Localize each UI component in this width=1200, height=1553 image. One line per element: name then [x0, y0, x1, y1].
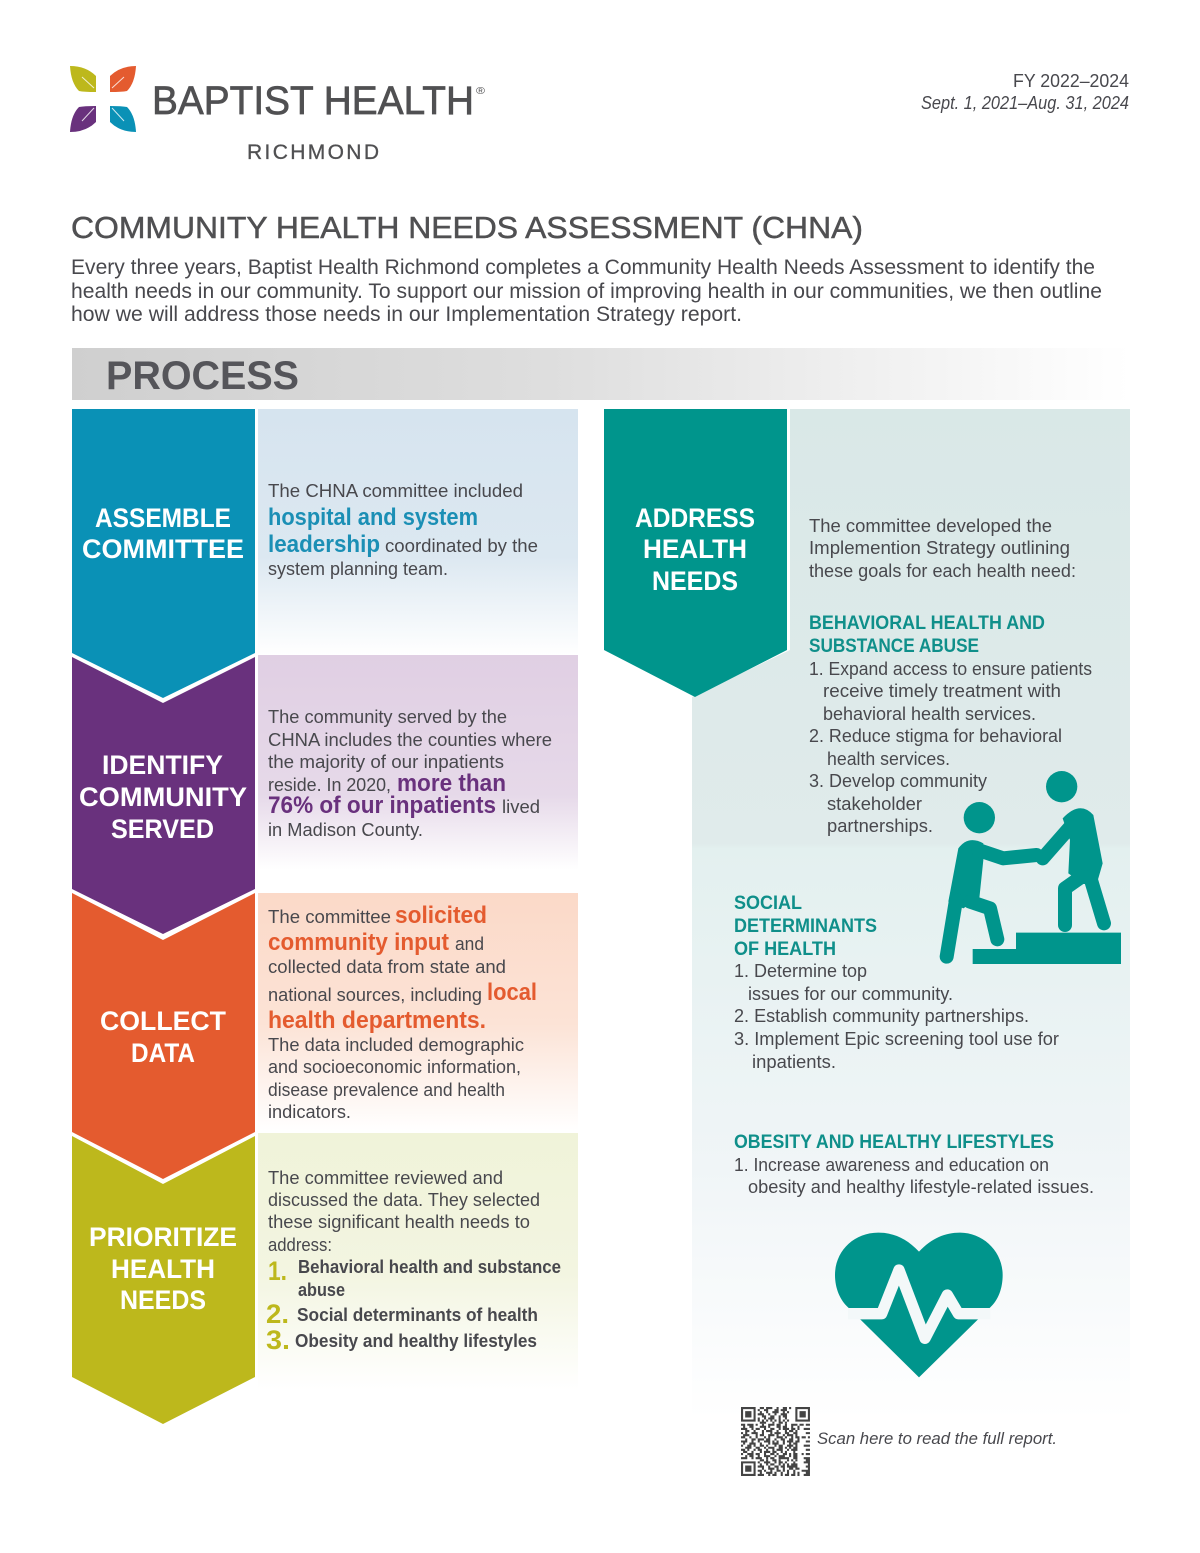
panel: assemble committee text: coordinated by the: [385, 536, 538, 556]
text: behavioral health goals: 1. Expand access to ensure patients: [809, 659, 1092, 679]
chevron: identify community served: IDENTIFY: [102, 750, 223, 780]
panel: prioritize health needs text: The committee reviewed and: [268, 1168, 503, 1188]
chevron: prioritize health needs: [72, 1136, 255, 1424]
chevron: address health needs: ADDRESS: [635, 503, 755, 533]
text: social determinants goals: SOCIAL: [734, 893, 802, 914]
panel: prioritize health needs text: 2.: [266, 1299, 289, 1329]
panel: identify community text: lived: [502, 797, 540, 817]
process heading bar: [72, 348, 1130, 400]
QR code: [741, 1408, 810, 1475]
step: collect data: [72, 893, 578, 1179]
registered mark: ®: [476, 86, 486, 97]
panel: prioritize health needs text: 3.: [266, 1325, 290, 1355]
text: behavioral health goals: BEHAVIORAL HEALTH AND: [809, 613, 1045, 634]
text: social determinants goals: DETERMINANTS: [734, 916, 877, 937]
panel: collect data text: collected data from state and: [268, 957, 506, 977]
QR caption: Scan here to read the full report.: [817, 1429, 1057, 1448]
process heading bar: PROCESS: [106, 354, 299, 398]
panel: identify community text: The community served by the: [268, 707, 507, 727]
panel: collect data text: indicators.: [268, 1102, 351, 1122]
brand name: BAPTIST HEALTH: [152, 79, 474, 123]
panel: identify community text: 76% of our inpatients: [268, 792, 496, 819]
panel: identify community text: [258, 655, 578, 870]
panel: collect data text: community input: [268, 929, 449, 956]
chevron: identify community served: COMMUNITY: [79, 782, 247, 812]
text: strategy intro: these goals for each health need:: [809, 561, 1076, 581]
text: behavioral health goals: 3. Develop community: [809, 771, 987, 791]
chevron: assemble committee: ASSEMBLE: [95, 503, 231, 533]
chevron: collect data: COLLECT: [100, 1006, 226, 1036]
text: behavioral health goals: stakeholder: [827, 794, 922, 814]
intro text: health needs in our community. To support our mission of improving health in our communities, we then outline: [71, 280, 1102, 303]
text: obesity goals: obesity and healthy lifestyle-related issues.: [748, 1177, 1094, 1197]
panel: assemble committee text: leadership: [268, 531, 380, 558]
text: social determinants goals: 3. Implement Epic screening tool use for: [734, 1029, 1059, 1049]
icon: four-leaf mark: [70, 66, 136, 132]
chevron: prioritize health needs: NEEDS: [120, 1285, 206, 1315]
panel: collect data text: and socioeconomic information,: [268, 1057, 521, 1077]
text: behavioral health goals: 2. Reduce stigma for behavioral: [809, 726, 1062, 746]
text: behavioral health goals: behavioral health services.: [823, 704, 1036, 724]
panel: assemble committee text: hospital and system: [268, 504, 478, 531]
panel: prioritize health needs text: Behavioral health and substance: [298, 1257, 561, 1277]
text: social determinants goals: OF HEALTH: [734, 939, 836, 960]
chevron: address health needs: NEEDS: [652, 566, 738, 596]
text: social determinants goals: [734, 893, 1059, 1072]
panel: collect data text: local: [487, 979, 537, 1006]
fiscal year dates: FY 2022–2024: [1013, 71, 1129, 91]
chevron: address health needs: HEALTH: [643, 534, 747, 564]
panel: prioritize health needs text: Obesity and healthy lifestyles: [295, 1331, 537, 1351]
panel: prioritize health needs text: discussed the data. They selected: [268, 1190, 540, 1210]
panel: address health needs background: [692, 409, 1130, 1420]
text: obesity goals: [734, 1132, 1094, 1197]
panel: collect data text: The data included demographic: [268, 1035, 524, 1055]
panel: identify community text: more than: [397, 770, 506, 797]
panel: collect data text: health departments.: [268, 1007, 486, 1034]
panel: prioritize health needs text: abuse: [298, 1280, 345, 1300]
intro text: [71, 256, 1102, 326]
chevron: prioritize health needs: HEALTH: [111, 1254, 215, 1284]
location name: RICHMOND: [247, 141, 379, 164]
panel: assemble committee text: [258, 409, 578, 655]
intro text: how we will address those needs in our Implementation Strategy report.: [71, 303, 742, 326]
panel: prioritize health needs text: 1.: [268, 1256, 287, 1286]
step: address health needs: [604, 409, 1130, 1420]
text: behavioral health goals: receive timely treatment with: [823, 681, 1061, 701]
title: COMMUNITY HEALTH NEEDS ASSESSMENT (CHNA): [71, 210, 863, 245]
text: behavioral health goals: [809, 613, 1092, 836]
text: behavioral health goals: health services.: [827, 749, 950, 769]
chevron: identify community served: SERVED: [111, 814, 214, 844]
text: social determinants goals: inpatients.: [752, 1052, 836, 1072]
text: strategy intro: The committee developed the: [809, 516, 1052, 536]
chevron: prioritize health needs: PRIORITIZE: [89, 1222, 237, 1252]
panel: prioritize health needs text: address:: [268, 1235, 332, 1255]
chevron: collect data: [72, 893, 255, 1179]
step: prioritize health needs: [72, 1133, 578, 1424]
text: social determinants goals: 1. Determine top: [734, 961, 867, 981]
panel: collect data text: national sources, including: [268, 985, 482, 1005]
text: strategy intro: [809, 516, 1076, 581]
logo: [70, 66, 486, 164]
panel: assemble committee text: system planning team.: [268, 559, 448, 579]
text: behavioral health goals: SUBSTANCE ABUSE: [809, 636, 979, 657]
fiscal year dates: [921, 71, 1129, 113]
chevron: collect data: DATA: [131, 1038, 195, 1068]
text: social determinants goals: 2. Establish community partnerships.: [734, 1006, 1029, 1026]
chevron: address health needs: [604, 409, 787, 697]
fiscal year dates: Sept. 1, 2021–Aug. 31, 2024: [921, 93, 1129, 113]
chevron: identify community served: [72, 657, 255, 934]
panel: assemble committee text: The CHNA committee included: [268, 481, 523, 501]
text: obesity goals: 1. Increase awareness and education on: [734, 1155, 1049, 1175]
step: identify community served: [72, 655, 578, 934]
panel: identify community text: the majority of our inpatients: [268, 752, 504, 772]
chevron: assemble committee: COMMITTEE: [82, 534, 244, 564]
step: assemble committee: [72, 409, 578, 698]
panel: prioritize health needs text: these significant health needs to: [268, 1212, 530, 1232]
panel: collect data text: disease prevalence and health: [268, 1080, 505, 1100]
text: strategy intro: Implemention Strategy outlining: [809, 538, 1070, 558]
panel: identify community text: reside. In 2020,: [268, 775, 391, 795]
panel: collect data text: and: [455, 934, 484, 954]
icon: heart with pulse line: [835, 1233, 1003, 1377]
text: social determinants goals: issues for our community.: [748, 984, 953, 1004]
panel: collect data text: solicited: [395, 902, 487, 929]
panel: collect data text: The committee: [268, 907, 391, 927]
panel: identify community text: in Madison County.: [268, 820, 423, 840]
chevron: assemble committee: [72, 409, 255, 698]
panel: prioritize health needs text: Social determinants of health: [297, 1305, 538, 1325]
panel: collect data text: [258, 893, 578, 1131]
text: obesity goals: OBESITY AND HEALTHY LIFESTYLES: [734, 1132, 1054, 1153]
text: behavioral health goals: partnerships.: [827, 816, 933, 836]
panel: identify community text: CHNA includes the counties where: [268, 730, 552, 750]
intro text: Every three years, Baptist Health Richmond completes a Community Health Needs Assessment to identify the: [71, 256, 1095, 279]
panel: prioritize health needs text: [258, 1133, 578, 1390]
icon: person helping another up steps: [947, 771, 1121, 964]
